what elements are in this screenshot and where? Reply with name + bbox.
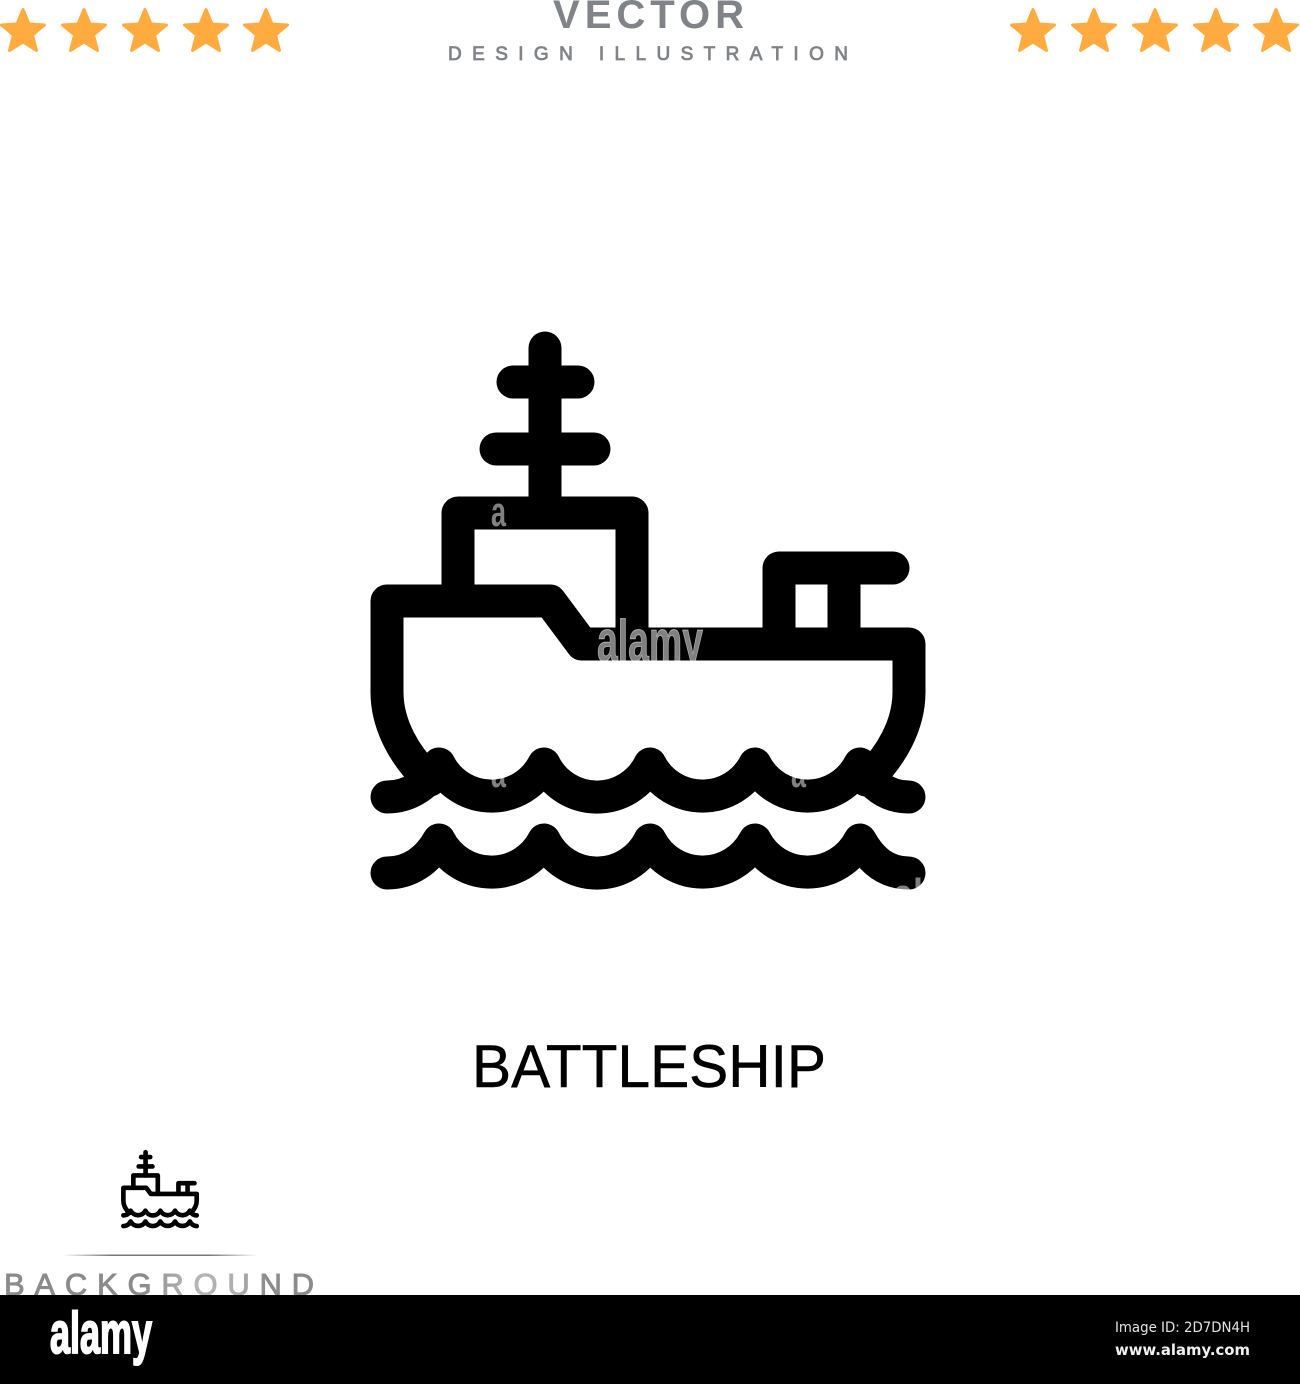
website: www.alamy.com bbox=[1115, 1341, 1250, 1359]
label: BACKGROUND: BACKGROUND bbox=[4, 1267, 314, 1302]
image id: Image ID: 2D7DN4H bbox=[1115, 1320, 1250, 1336]
footer bar bbox=[0, 1295, 1300, 1384]
watermark over icon bbox=[491, 488, 923, 917]
logo: alamy: alamy bbox=[50, 1301, 152, 1366]
watermark over icon: al bbox=[893, 870, 923, 917]
left star rating bbox=[2, 10, 288, 50]
icon: battleship large bbox=[387, 348, 909, 873]
watermark over icon: a bbox=[791, 749, 806, 796]
subheading: DESIGN ILLUSTRATION: DESIGN ILLUSTRATION bbox=[448, 44, 848, 65]
title: BATTLESHIP: BATTLESHIP bbox=[472, 1033, 826, 1100]
right star rating bbox=[1012, 10, 1298, 50]
watermark over icon: a bbox=[491, 488, 506, 535]
watermark over icon: alamy bbox=[597, 609, 703, 674]
icon: battleship small bbox=[123, 1152, 197, 1226]
watermark over icon: a bbox=[491, 749, 506, 796]
